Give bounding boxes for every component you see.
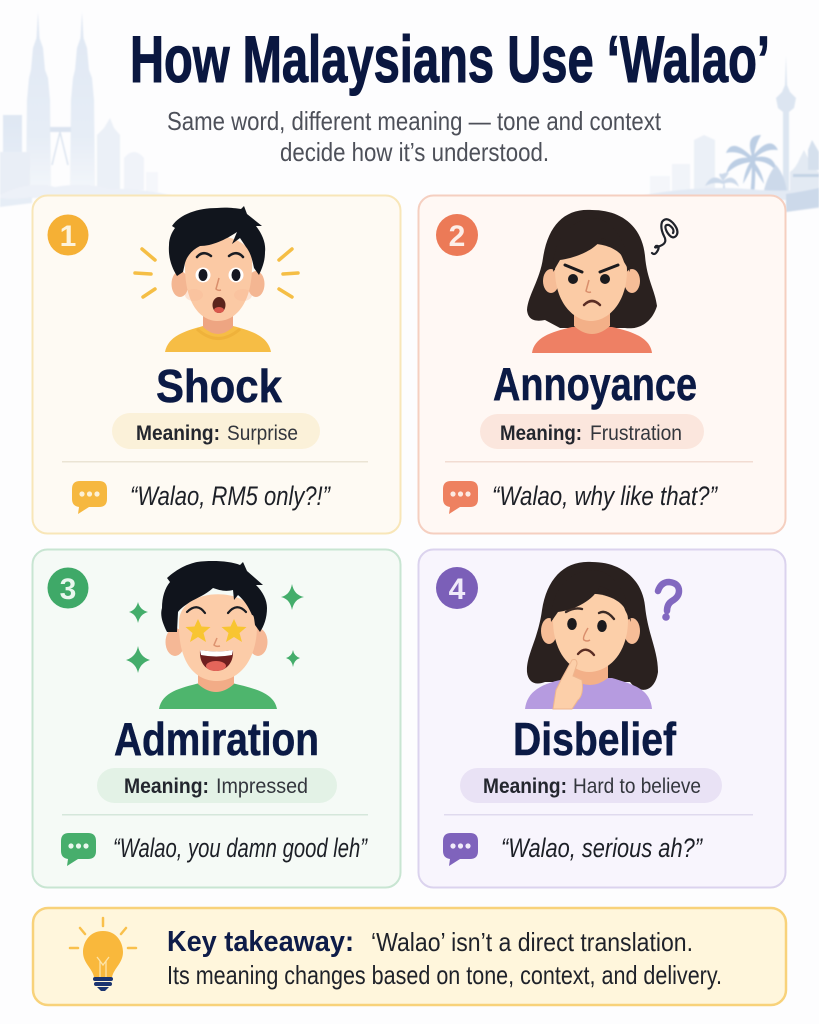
illustration: shocked boy [165, 206, 271, 352]
meaning pill [112, 413, 320, 449]
skyline: Kuala Lumpur left [0, 12, 175, 207]
small palm [705, 173, 739, 196]
subtitle: decide how it’s understood. [280, 137, 549, 167]
number badge 3 [48, 568, 88, 608]
icon: speech bubble [72, 481, 107, 514]
meaning pill: Frustration [590, 422, 682, 445]
icon: frustration squiggle [652, 219, 677, 254]
icon: surprise rays [135, 249, 298, 297]
number badge 3: 3 [60, 573, 76, 606]
icon: sparkles [126, 584, 304, 673]
meaning pill: Hard to believe [573, 775, 701, 798]
number badge 2 [436, 214, 478, 256]
takeaway text: Key takeaway: [167, 926, 354, 958]
meaning pill: Meaning: [124, 775, 209, 798]
meaning pill [97, 768, 337, 803]
icon: light bulb [70, 918, 136, 991]
illustration: admiring boy [159, 561, 277, 709]
meaning pill: Meaning: [483, 775, 567, 798]
heading: Annoyance: Annoyance [493, 358, 697, 410]
meaning pill: Meaning: [136, 422, 220, 445]
meaning pill [460, 768, 722, 803]
quote: “Walao, serious ah?” [501, 833, 703, 863]
quote: “Walao, you damn good leh” [113, 833, 368, 863]
meaning pill: Surprise [227, 422, 298, 445]
subtitle [167, 106, 662, 167]
subtitle: Same word, different meaning — tone and context [167, 106, 662, 136]
icon: speech bubble [443, 833, 478, 866]
icon: speech bubble [443, 481, 478, 514]
heading: Shock: Shock [156, 360, 282, 412]
icon: speech bubble [61, 833, 96, 866]
takeaway text [167, 926, 722, 990]
panel: disbelief [418, 550, 786, 888]
panel: shock [32, 196, 400, 534]
takeaway text: ‘Walao’ isn’t a direct translation. [371, 927, 693, 957]
number badge 2: 2 [449, 220, 465, 253]
quote: “Walao, why like that?” [492, 481, 718, 511]
skyline: Kuala Lumpur right [640, 55, 819, 212]
number badge 1 [48, 214, 88, 256]
quote: “Walao, RM5 only?!” [130, 481, 331, 511]
heading: Admiration: Admiration [114, 713, 319, 765]
heading: Disbelief: Disbelief [513, 713, 677, 765]
illustration: annoyed woman [527, 210, 657, 353]
number badge 4 [436, 567, 478, 609]
panel: annoyance [418, 196, 786, 534]
number badge 1: 1 [60, 220, 76, 253]
palm tree [726, 135, 778, 196]
panel: key takeaway [33, 908, 786, 1005]
meaning pill [480, 414, 704, 449]
icon: question mark [658, 582, 679, 621]
panel: admiration [32, 550, 400, 888]
meaning pill: Impressed [216, 775, 308, 798]
number badge 4: 4 [449, 573, 466, 606]
illustration: doubtful woman [525, 562, 658, 709]
takeaway text: Its meaning changes based on tone, context, and delivery. [167, 960, 722, 990]
meaning pill: Meaning: [500, 422, 582, 445]
